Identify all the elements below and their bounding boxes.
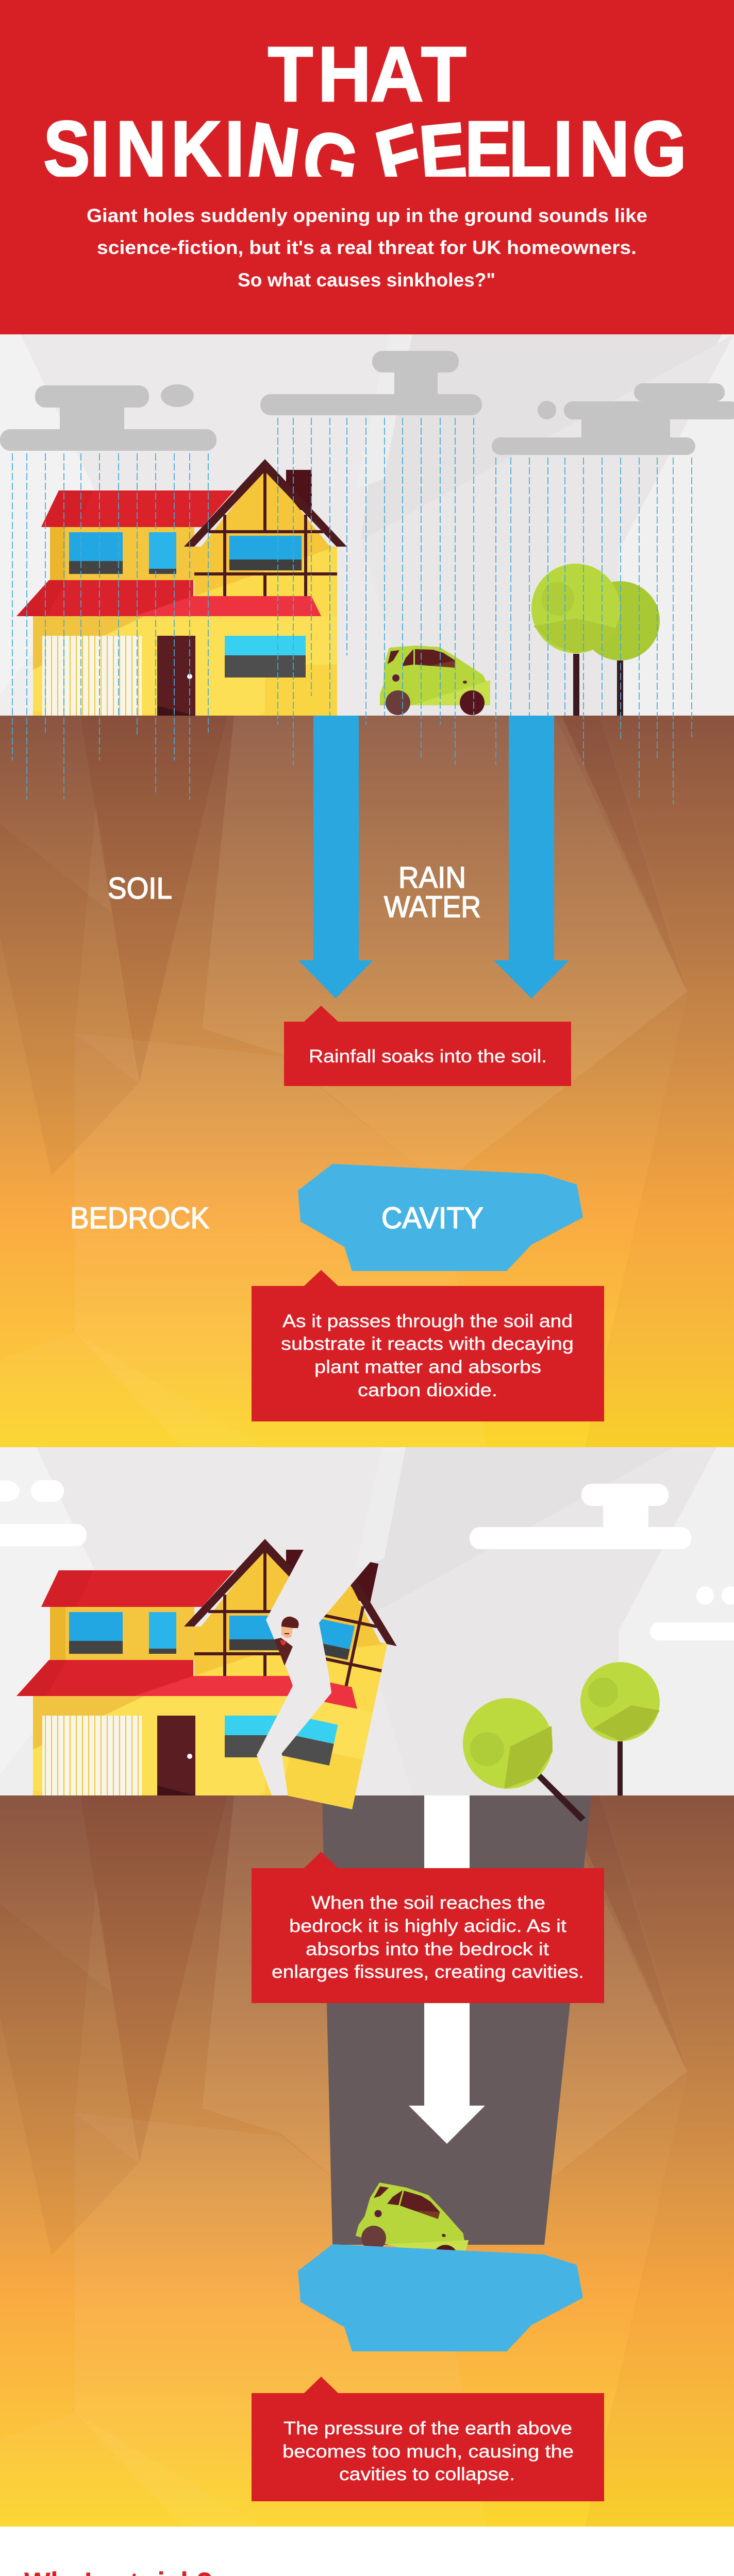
- house: left half: [16, 1539, 304, 1795]
- intro text: [87, 205, 647, 291]
- callout: carbon dioxide: carbon dioxide.: [358, 1380, 497, 1400]
- tree: standing: [580, 1662, 660, 1795]
- callout: pressure: [252, 2377, 604, 2501]
- arrow: white down: [409, 1795, 485, 2144]
- callout: carbon dioxide: substrate it reacts with decaying: [281, 1334, 574, 1354]
- car: falling into the cavity: [353, 2178, 478, 2274]
- sky background: first scene: [0, 334, 734, 716]
- callout: acidic soil: bedrock it is highly acidic. As it: [289, 1916, 566, 1936]
- callout: acidic soil: [252, 1852, 604, 2003]
- callout: carbon dioxide: [252, 1270, 604, 1421]
- callout: pressure: becomes too much, causing the: [282, 2442, 574, 2462]
- car: on the road: [380, 646, 490, 715]
- label: soil: SOIL: [108, 872, 172, 905]
- label: rain water: RAIN: [398, 861, 466, 894]
- callout: acidic soil: absorbs into the bedrock it: [306, 1939, 549, 1959]
- arrow: rain water left: [298, 716, 373, 998]
- title: THAT: THAT: [268, 31, 466, 118]
- tree: falling: [463, 1698, 586, 1822]
- header panel: [0, 0, 734, 334]
- soil layer: first scene: [0, 716, 734, 1447]
- house: intact: [16, 459, 347, 716]
- soil layer: second scene: [0, 1795, 734, 2527]
- callout: rainfall: Rainfall soaks into the soil.: [309, 1046, 547, 1066]
- label: rain water: [384, 861, 481, 924]
- cavity: collapsed: [298, 2244, 583, 2351]
- clouds: grey rain clouds: [0, 351, 734, 455]
- label: rain water: WATER: [384, 890, 481, 924]
- intro text: Giant holes suddenly opening up in the ground sounds like: [87, 205, 647, 226]
- sky background: second scene: [0, 1414, 734, 1795]
- rain lines: [12, 418, 692, 804]
- arrow: rain water right: [494, 716, 569, 998]
- label: bedrock: BEDROCK: [70, 1201, 209, 1235]
- callout: acidic soil: When the soil reaches the: [311, 1893, 545, 1913]
- footer panel: [0, 2527, 734, 2576]
- callout: acidic soil: enlarges fissures, creating cavities.: [272, 1962, 584, 1982]
- trees: first scene: [531, 564, 660, 716]
- title: SINKING FEELING: SINKING FEELING: [43, 105, 686, 210]
- callout: pressure: cavities to collapse.: [339, 2464, 515, 2484]
- callout: carbon dioxide: As it passes through the soil and: [282, 1311, 573, 1331]
- sinkhole shaft: [322, 1795, 591, 2245]
- callout: rainfall: [284, 1006, 571, 1086]
- house: right half, tilted: [281, 1562, 397, 1809]
- label: cavity: CAVITY: [381, 1201, 483, 1235]
- callout: carbon dioxide: plant matter and absorbs: [314, 1357, 541, 1377]
- intro text: So what causes sinkholes?": [238, 269, 495, 291]
- man in the crack: [274, 1617, 299, 1666]
- callout: pressure: The pressure of the earth above: [283, 2418, 572, 2438]
- intro text: science-fiction, but it's a real threat for UK homeowners.: [97, 237, 637, 258]
- clouds: white: [0, 1480, 734, 1640]
- cavity: [298, 1164, 583, 1271]
